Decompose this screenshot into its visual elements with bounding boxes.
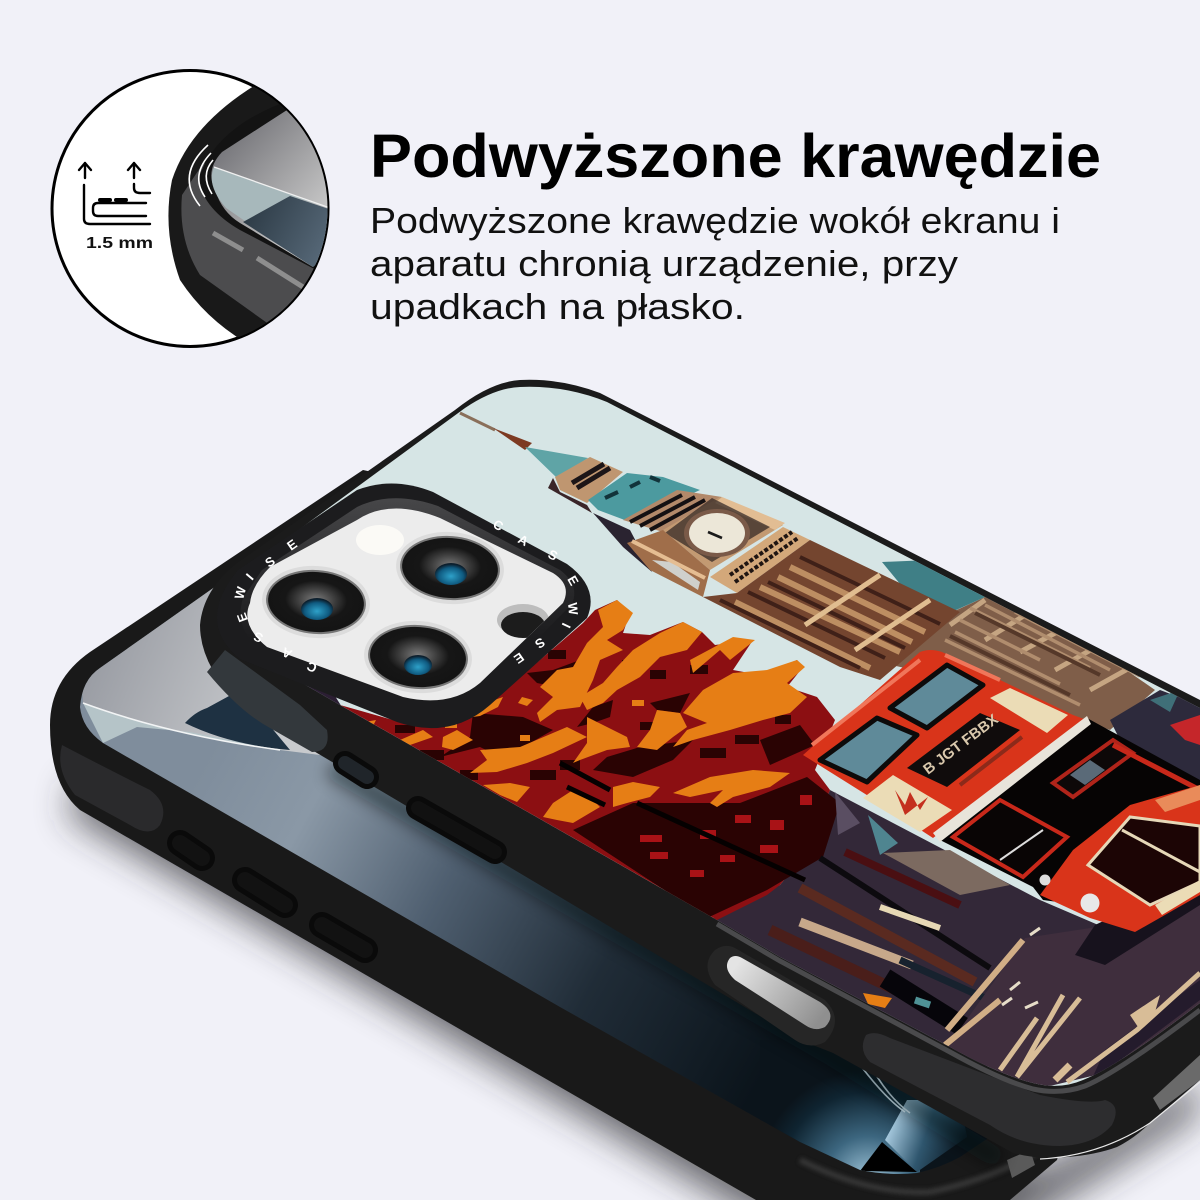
street scene base xyxy=(714,790,1097,1066)
background parliament building xyxy=(870,560,1200,790)
left clock side xyxy=(627,530,710,597)
bottom corner bumper xyxy=(863,1033,1116,1146)
lens ring bottom xyxy=(362,617,474,697)
white stripe xyxy=(933,716,1091,842)
camera-side corner bumper xyxy=(207,650,328,752)
sky xyxy=(304,386,1200,1086)
underside shadow xyxy=(593,513,652,572)
road xyxy=(943,895,1200,1086)
cream panels xyxy=(990,688,1068,733)
lens bezel bevel xyxy=(241,498,574,704)
bus sign text: B JGT FBBX xyxy=(920,711,1002,778)
destination sign xyxy=(907,713,1020,787)
speaker holes xyxy=(1153,1055,1200,1110)
orange leaves xyxy=(365,600,807,823)
spire xyxy=(460,413,495,430)
label: 1.5 mm: 1.5 mm xyxy=(86,235,153,252)
bus logo mark xyxy=(895,790,928,815)
second bus front xyxy=(1040,785,1200,932)
teal roof xyxy=(882,560,985,615)
belfry xyxy=(555,457,623,503)
description text: aparatu chronią urządzenie, przy xyxy=(370,243,958,284)
lidar xyxy=(497,604,549,636)
shadow of front phone on back phone xyxy=(330,768,1000,1160)
lens ring left xyxy=(260,562,372,642)
dark tree patches xyxy=(395,640,840,918)
front phone case xyxy=(200,380,1200,1159)
front phone side button xyxy=(418,808,495,852)
CASEWISE ring text right: CASEWISE xyxy=(491,516,582,667)
deck windows xyxy=(820,718,917,782)
tree detail pixels xyxy=(640,795,812,877)
front phone mute switch xyxy=(345,763,367,777)
striped band xyxy=(710,527,810,593)
camera island xyxy=(217,483,591,728)
charging port xyxy=(708,946,835,1046)
lower rim reflection xyxy=(1040,1082,1200,1159)
street scene xyxy=(770,792,1010,1030)
icon: raised edge close-up circle xyxy=(52,70,345,350)
back phone screen xyxy=(80,588,987,1174)
description text xyxy=(370,200,1060,327)
slatted section xyxy=(623,490,722,532)
dark navy block xyxy=(1110,690,1200,790)
icon: 1.5 mm edge diagram xyxy=(79,163,150,224)
lens ring top xyxy=(394,528,506,608)
description text: Podwyższone krawędzie wokół ekranu i xyxy=(370,200,1060,241)
upper deck xyxy=(803,650,1087,838)
description text: upadkach na płasko. xyxy=(370,286,745,327)
back case corner bumper xyxy=(60,745,163,832)
back case lower highlight xyxy=(800,1150,1040,1192)
Big Ben tower xyxy=(460,413,960,680)
back phone buttons xyxy=(180,843,365,950)
clock face xyxy=(684,509,750,557)
close-up of case corner xyxy=(168,86,328,338)
title: Podwyższone krawędzie xyxy=(370,122,1101,190)
flash xyxy=(356,525,404,555)
back phone case xyxy=(50,470,1100,1200)
case artwork: London xyxy=(304,386,1200,1086)
screen reflection xyxy=(780,1081,920,1174)
CASEWISE ring text left: CASEWISE xyxy=(231,536,319,676)
red double-decker bus xyxy=(803,650,1200,932)
headlights xyxy=(1040,874,1050,886)
back case gray port xyxy=(1007,1150,1035,1178)
phone drop shadow xyxy=(68,780,1198,1200)
clock block xyxy=(663,497,783,570)
purple strip beside camera xyxy=(306,686,341,706)
tower shaft xyxy=(703,540,960,680)
camera window xyxy=(247,508,566,700)
inner edge highlight xyxy=(717,924,1200,1091)
autumn tree xyxy=(340,600,840,920)
large teal roof xyxy=(588,473,700,522)
lower bus body xyxy=(940,718,1200,910)
